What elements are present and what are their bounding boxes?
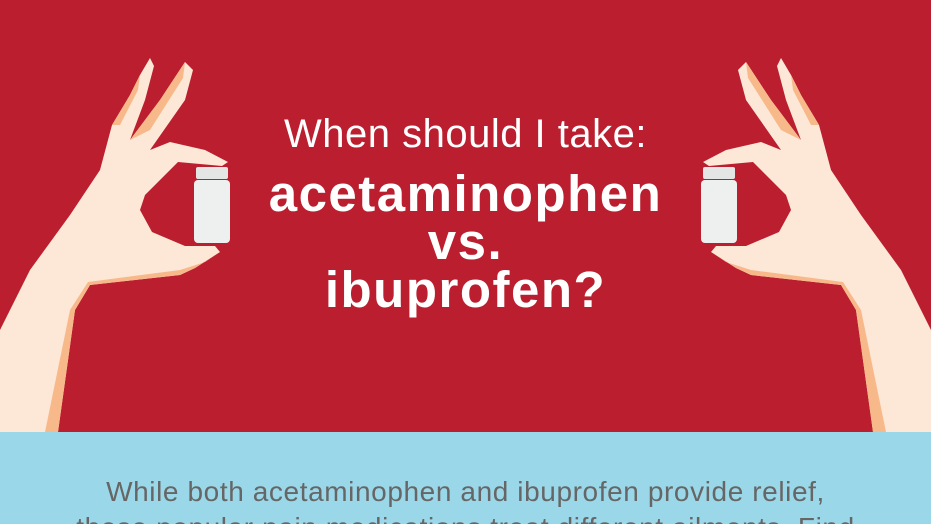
intro text: While both acetaminophen and ibuprofen provide relief, [106,476,825,507]
bottle [194,167,230,243]
panel: intro [0,432,931,524]
title: drug names: acetaminophen [269,165,662,222]
title: drug names [269,165,662,318]
title: question: When should I take: [284,112,647,156]
title: drug names: vs. [428,213,503,270]
title: drug names: ibuprofen? [325,261,606,318]
left hand [0,58,230,432]
right hand (mirrored) [701,58,931,432]
intro text [76,476,855,524]
